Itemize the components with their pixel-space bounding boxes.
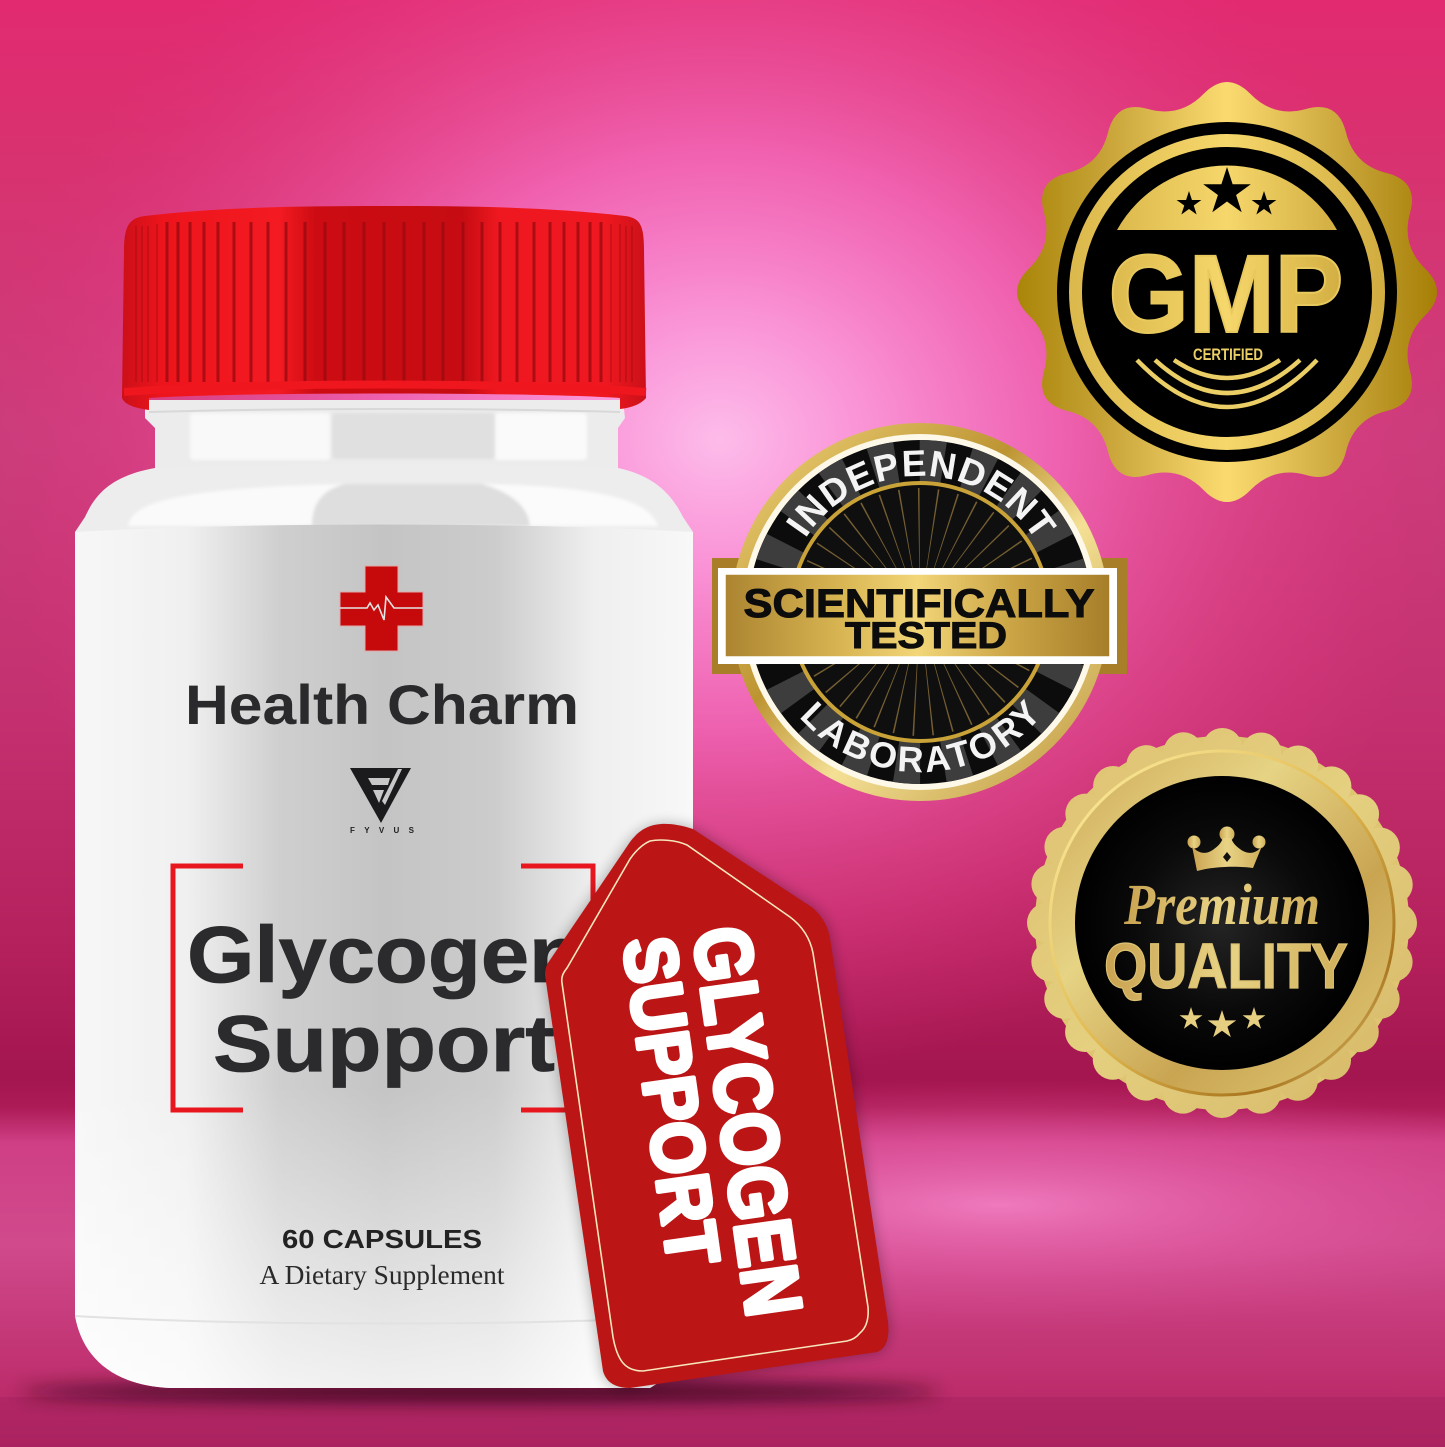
seal ring — [731, 423, 1109, 801]
badge: premium quality — [1035, 736, 1409, 1110]
tag text: support: SUPPORT — [607, 932, 735, 1270]
GMP stars — [1177, 167, 1276, 215]
brand name: Health Charm — [185, 673, 579, 736]
product name: Glycogen — [187, 910, 582, 999]
icon: crown — [1188, 826, 1266, 871]
premium black centre — [1075, 776, 1369, 1070]
three stars — [1180, 1007, 1265, 1037]
premium scalloped edge — [1035, 736, 1409, 1110]
bottle shoulder — [75, 464, 693, 600]
product name: Support — [213, 999, 555, 1088]
badge: GMP certified — [1017, 82, 1437, 502]
red bracket — [173, 866, 593, 1110]
product name — [187, 910, 582, 1088]
premium script: Premium — [1123, 872, 1320, 937]
bottle — [75, 206, 693, 1388]
supplement label: A Dietary Supplement — [260, 1260, 505, 1290]
icon: Fyvus logo — [350, 768, 415, 835]
bottle neck — [145, 400, 625, 480]
bottle label and body — [75, 524, 693, 1388]
red tag — [545, 824, 888, 1388]
gold banner: TESTED — [845, 615, 1007, 656]
quality: QUALITY — [1104, 930, 1348, 1002]
badge curved text paths — [784, 476, 1056, 612]
tag shadow — [545, 825, 888, 1388]
certified text: CERTIFIED — [1193, 346, 1263, 364]
icon: red medical cross — [340, 566, 423, 651]
GMP text: GMP — [1108, 233, 1344, 356]
GMP bottom arcs — [1137, 360, 1317, 407]
GMP scalloped gold seal — [1017, 82, 1437, 502]
bottle cap — [122, 206, 646, 410]
tag text: glycogen: GLYCOGEN — [676, 921, 819, 1322]
GMP top dome — [1117, 165, 1337, 230]
capsule count: 60 CAPSULES — [282, 1224, 482, 1254]
GMP rings — [1057, 122, 1397, 462]
premium gold disc — [1050, 751, 1394, 1095]
banner back ends — [712, 558, 1127, 674]
badge: scientifically tested — [712, 423, 1127, 801]
gold banner: SCIENTIFICALLY — [744, 582, 1095, 626]
independent text: INDEPENDENT — [786, 450, 1057, 536]
gold banner — [718, 568, 1117, 664]
laboratory text: LABORATORY — [800, 698, 1036, 772]
floor shadow — [20, 1382, 940, 1402]
icon: Fyvus logo: FYVUS — [350, 826, 415, 835]
seal sunburst centre — [791, 483, 1049, 741]
